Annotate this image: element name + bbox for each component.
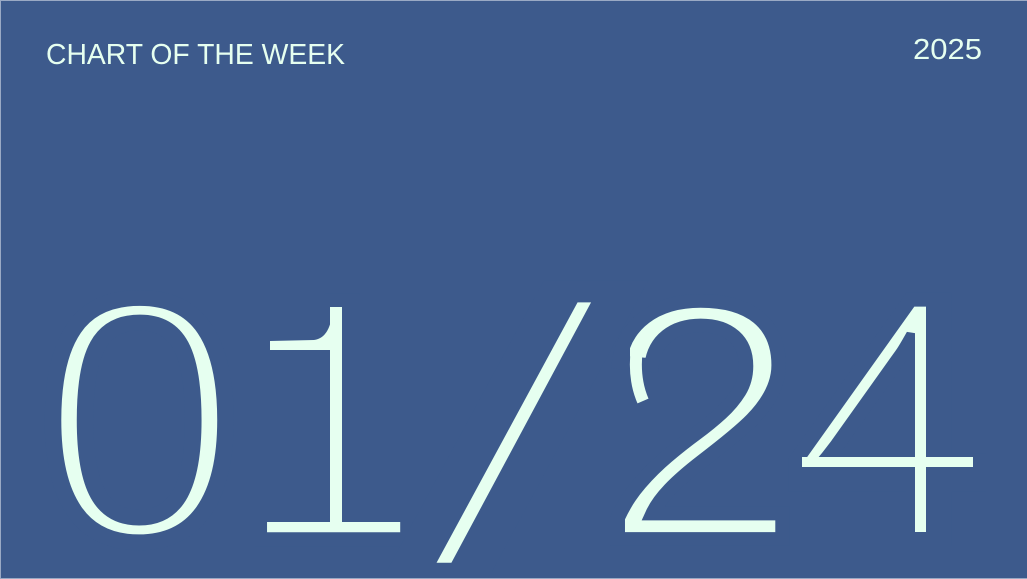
heading: chart of the week: CHART OF THE WEEK xyxy=(46,39,345,71)
large date number xyxy=(39,222,990,579)
year label: 2025 xyxy=(913,34,982,66)
